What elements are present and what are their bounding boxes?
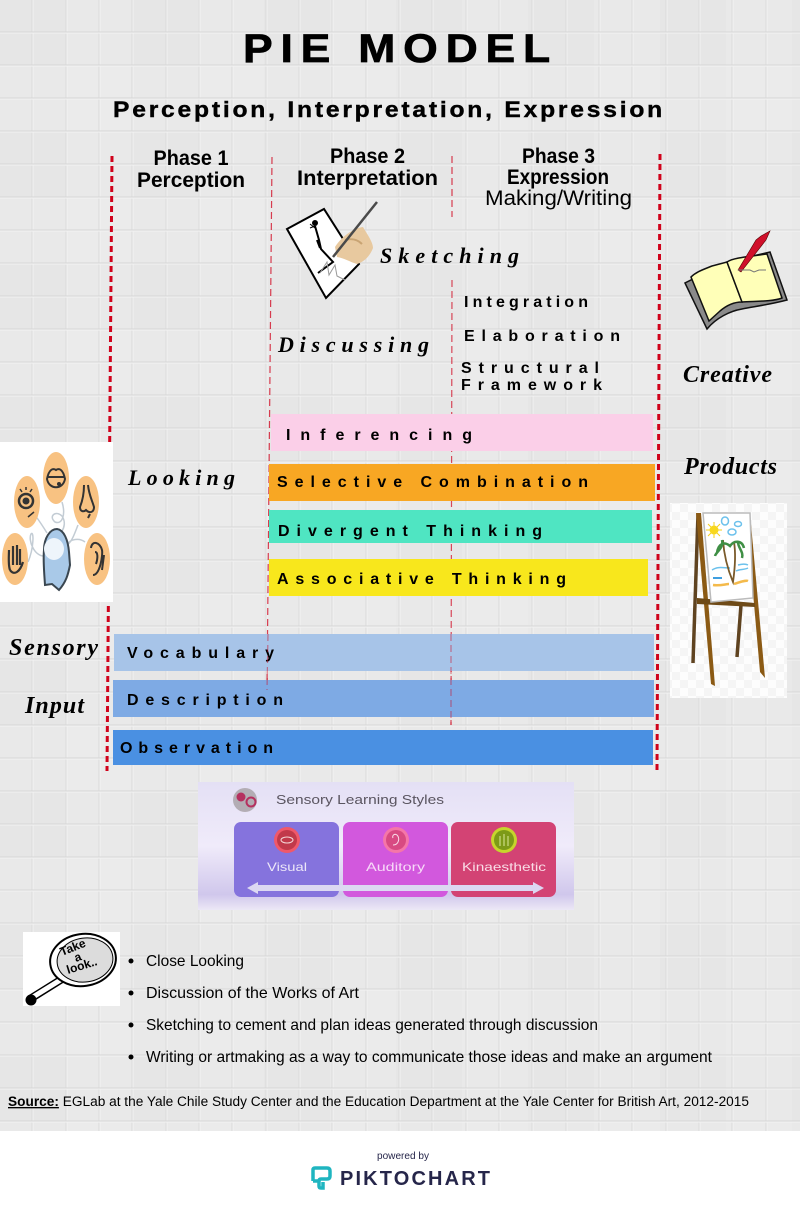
- bullet list: Sketching to cement and plan ideas generated through discussion: [146, 1017, 598, 1034]
- icon: easel with painting: [670, 503, 787, 698]
- bar: vocabulary: Vocabulary: [127, 645, 274, 662]
- label: creative: Creative: [683, 362, 772, 388]
- phase 2 heading: Interpretation: [297, 167, 438, 190]
- label: looking: Looking: [127, 465, 235, 490]
- bar: associative thinking: [269, 559, 648, 596]
- label: input: Input: [24, 693, 85, 719]
- title: PIE MODEL: [243, 27, 558, 71]
- phase divider lines: [107, 154, 660, 771]
- bar: description: [113, 680, 654, 717]
- footer credit: [313, 1151, 490, 1190]
- icon: take a look magnifier: Take: [58, 936, 88, 959]
- bullet list: [128, 953, 713, 1066]
- bar: selective combination: Selective Combination: [277, 474, 588, 491]
- icon: take a look magnifier: look..: [65, 954, 99, 977]
- footer band: [0, 1131, 800, 1211]
- phase 2 heading: Phase 2: [330, 145, 405, 168]
- phase 1 heading: Phase 1: [154, 147, 229, 170]
- label: products: Products: [683, 454, 777, 480]
- bullet list: Close Looking: [146, 953, 244, 970]
- bullet list: Writing or artmaking as a way to communicate those ideas and make an argument: [146, 1049, 713, 1066]
- bar: selective combination: [269, 464, 655, 501]
- phase 3 heading: Expression: [507, 166, 609, 189]
- expression skills list: [461, 294, 620, 394]
- bar: description: Description: [127, 692, 283, 709]
- panel: sensory learning styles: Auditory: [366, 860, 425, 874]
- source note: Source: EGLab at the Yale Chile Study Center and the Education Department at the Yale Center for British Art, 2012-2015: [8, 1094, 749, 1109]
- label: sensory: Sensory: [9, 635, 98, 661]
- icon: senses around head: [0, 442, 113, 602]
- label: sketching: Sketching: [380, 243, 519, 268]
- phase 1 heading: Perception: [137, 169, 245, 192]
- bar: divergent thinking: Divergent Thinking: [278, 523, 542, 540]
- icon: open book and pen: [685, 231, 787, 329]
- phase 3 heading: [485, 145, 632, 210]
- icon: take a look magnifier: a: [72, 949, 84, 965]
- thin guide lines over bars: [267, 634, 451, 725]
- footer credit: powered by: [377, 1151, 429, 1162]
- phase 2 heading: [297, 145, 438, 190]
- panel: sensory learning styles: Sensory Learning Styles: [276, 792, 445, 807]
- label: discussing: Discussing: [277, 332, 429, 357]
- expression skills list: Elaboration: [464, 328, 620, 345]
- bar: observation: [113, 730, 653, 765]
- phase 3 heading: Phase 3: [522, 145, 595, 168]
- icon: hand sketching on paper: [287, 202, 377, 298]
- bar: inferencing: [271, 414, 653, 451]
- subtitle: Perception, Interpretation, Expression: [113, 97, 665, 122]
- bar: divergent thinking: [269, 510, 652, 543]
- icon: take a look magnifier: [23, 930, 120, 1006]
- panel: sensory learning styles: Kinaesthetic: [462, 860, 546, 874]
- expression skills list: Integration: [464, 294, 588, 311]
- panel: sensory learning styles: Visual: [267, 860, 307, 874]
- icon: sensory logo: [233, 788, 257, 812]
- bar: inferencing: Inferencing: [286, 427, 472, 444]
- expression skills list: Framework: [461, 377, 602, 394]
- footer credit: PIKTOCHART: [340, 1168, 490, 1190]
- bar: observation: Observation: [120, 740, 273, 757]
- phase 1 heading: [137, 147, 245, 192]
- phase 3 heading: Making/Writing: [485, 187, 632, 210]
- bar: associative thinking: Associative Thinking: [277, 571, 566, 588]
- bar: vocabulary: [114, 634, 654, 671]
- expression skills list: Structural: [461, 360, 599, 377]
- bullet list: Discussion of the Works of Art: [146, 985, 360, 1002]
- panel: sensory learning styles: [198, 782, 574, 910]
